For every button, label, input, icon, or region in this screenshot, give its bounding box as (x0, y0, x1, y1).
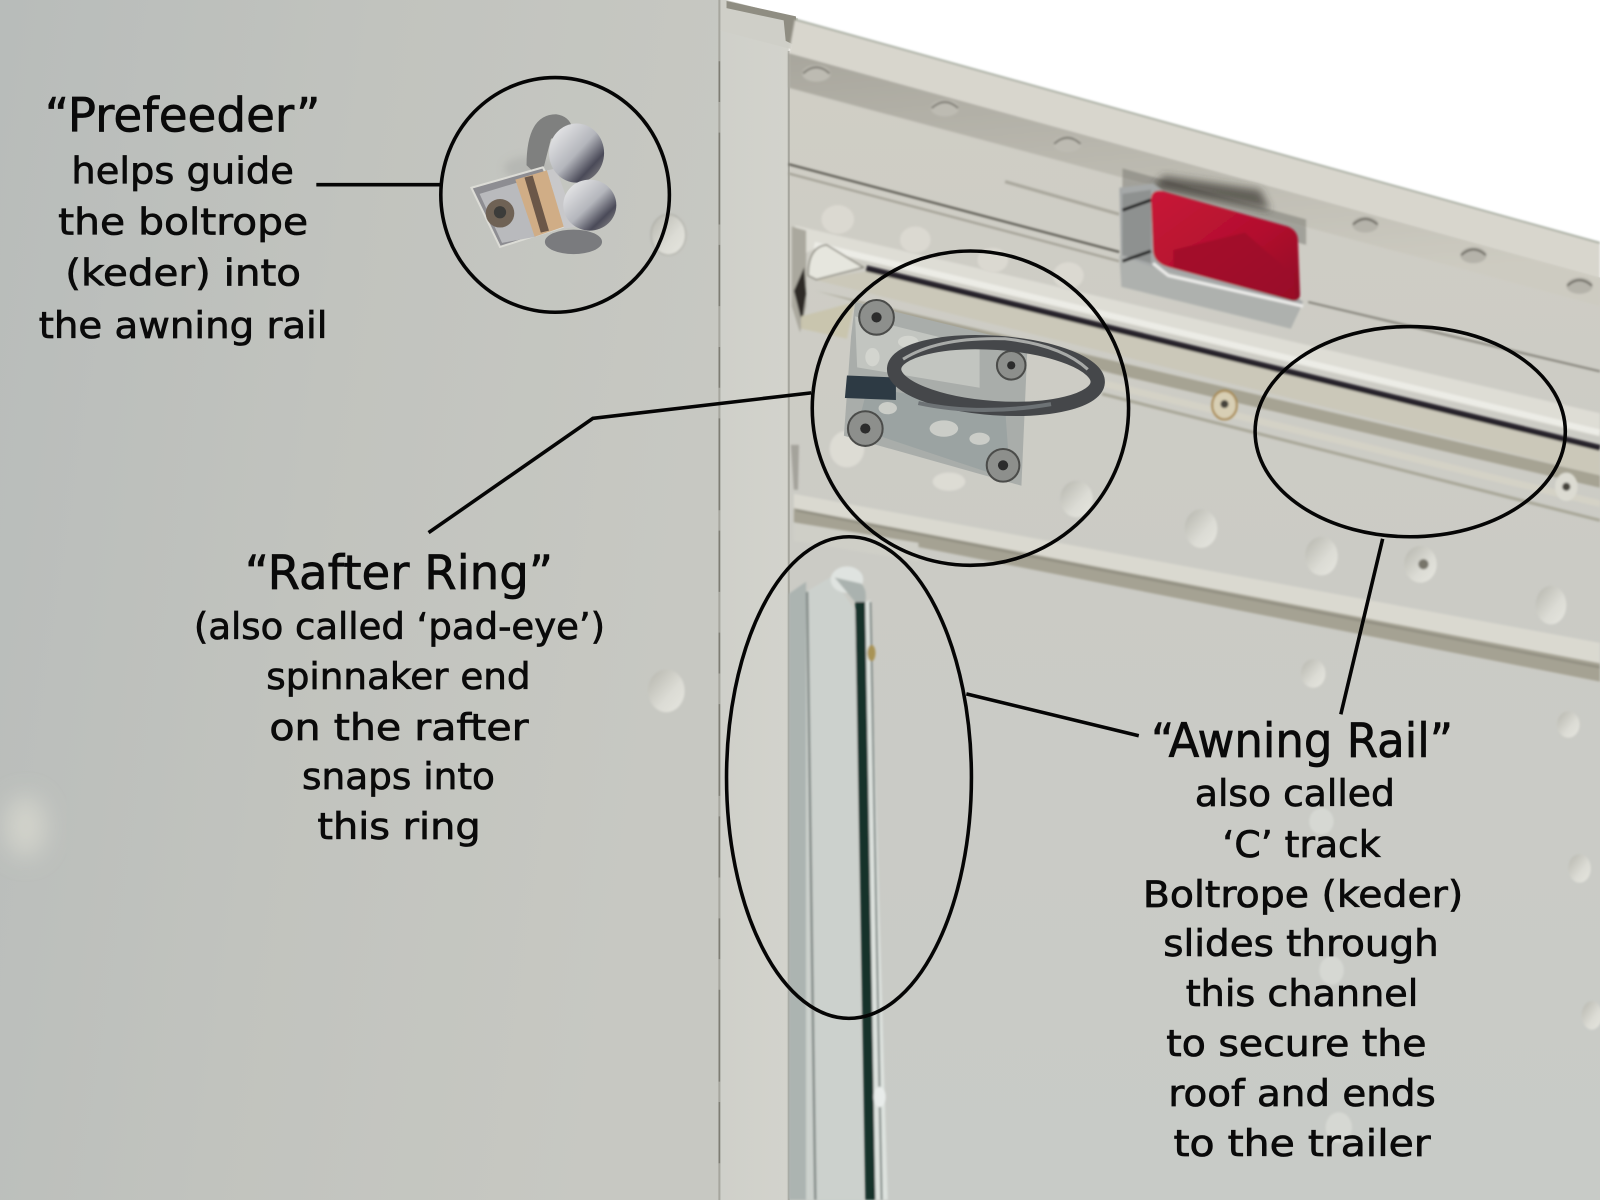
text block: rafter ring: on the rafter (269, 706, 530, 749)
text block: rafter ring: spinnaker end (266, 655, 531, 698)
text block: awning rail: slides through (1163, 922, 1439, 965)
text block: rafter ring: snaps into (302, 755, 495, 798)
text block: awning rail (1143, 714, 1463, 1165)
text block: rafter ring: (also called ‘pad-eye’) (194, 605, 605, 648)
leader line: prefeeder (316, 183, 441, 186)
callout circle: prefeeder (441, 78, 669, 312)
text block: awning rail: this channel (1186, 972, 1418, 1015)
text block: awning rail: “Awning Rail” (1151, 714, 1453, 769)
text block: prefeeder (39, 89, 328, 347)
text block: prefeeder: (keder) into (65, 252, 301, 295)
callout circle: vertical awning rail (727, 537, 971, 1018)
text block: prefeeder: “Prefeeder” (45, 89, 320, 144)
text block: awning rail: also called (1195, 772, 1395, 815)
rivets (648, 205, 1600, 1143)
top flange of the trailer roof (789, 19, 1600, 371)
text block: prefeeder: helps guide (71, 150, 294, 193)
text block: prefeeder: the awning rail (39, 304, 328, 347)
text block: rafter ring: this ring (317, 805, 481, 848)
text block: awning rail: ‘C’ track (1222, 823, 1381, 866)
leader line: awning rail top (1341, 539, 1383, 714)
leader line: rafter ring (429, 393, 811, 533)
rafter ring hardware (844, 300, 1100, 486)
text block: rafter ring (194, 546, 605, 848)
text block: awning rail: Boltrope (keder) (1143, 873, 1463, 916)
callout circle: rafter ring (812, 251, 1129, 565)
lower horizontal ridge (794, 494, 1600, 682)
vertical awning rail (789, 566, 888, 1200)
text block: awning rail: to secure the (1166, 1022, 1427, 1065)
red marker lamp (1119, 176, 1303, 329)
prefeeder hardware (471, 114, 616, 254)
leader line: awning rail side (966, 694, 1139, 736)
text block: awning rail: to the trailer (1173, 1122, 1432, 1165)
text block: rafter ring: “Rafter Ring” (245, 546, 553, 601)
callout circle: horizontal awning rail (1255, 327, 1565, 537)
horizontal awning rail (791, 226, 1600, 520)
text block: prefeeder: the boltrope (58, 201, 308, 244)
text block: awning rail: roof and ends (1168, 1072, 1436, 1115)
